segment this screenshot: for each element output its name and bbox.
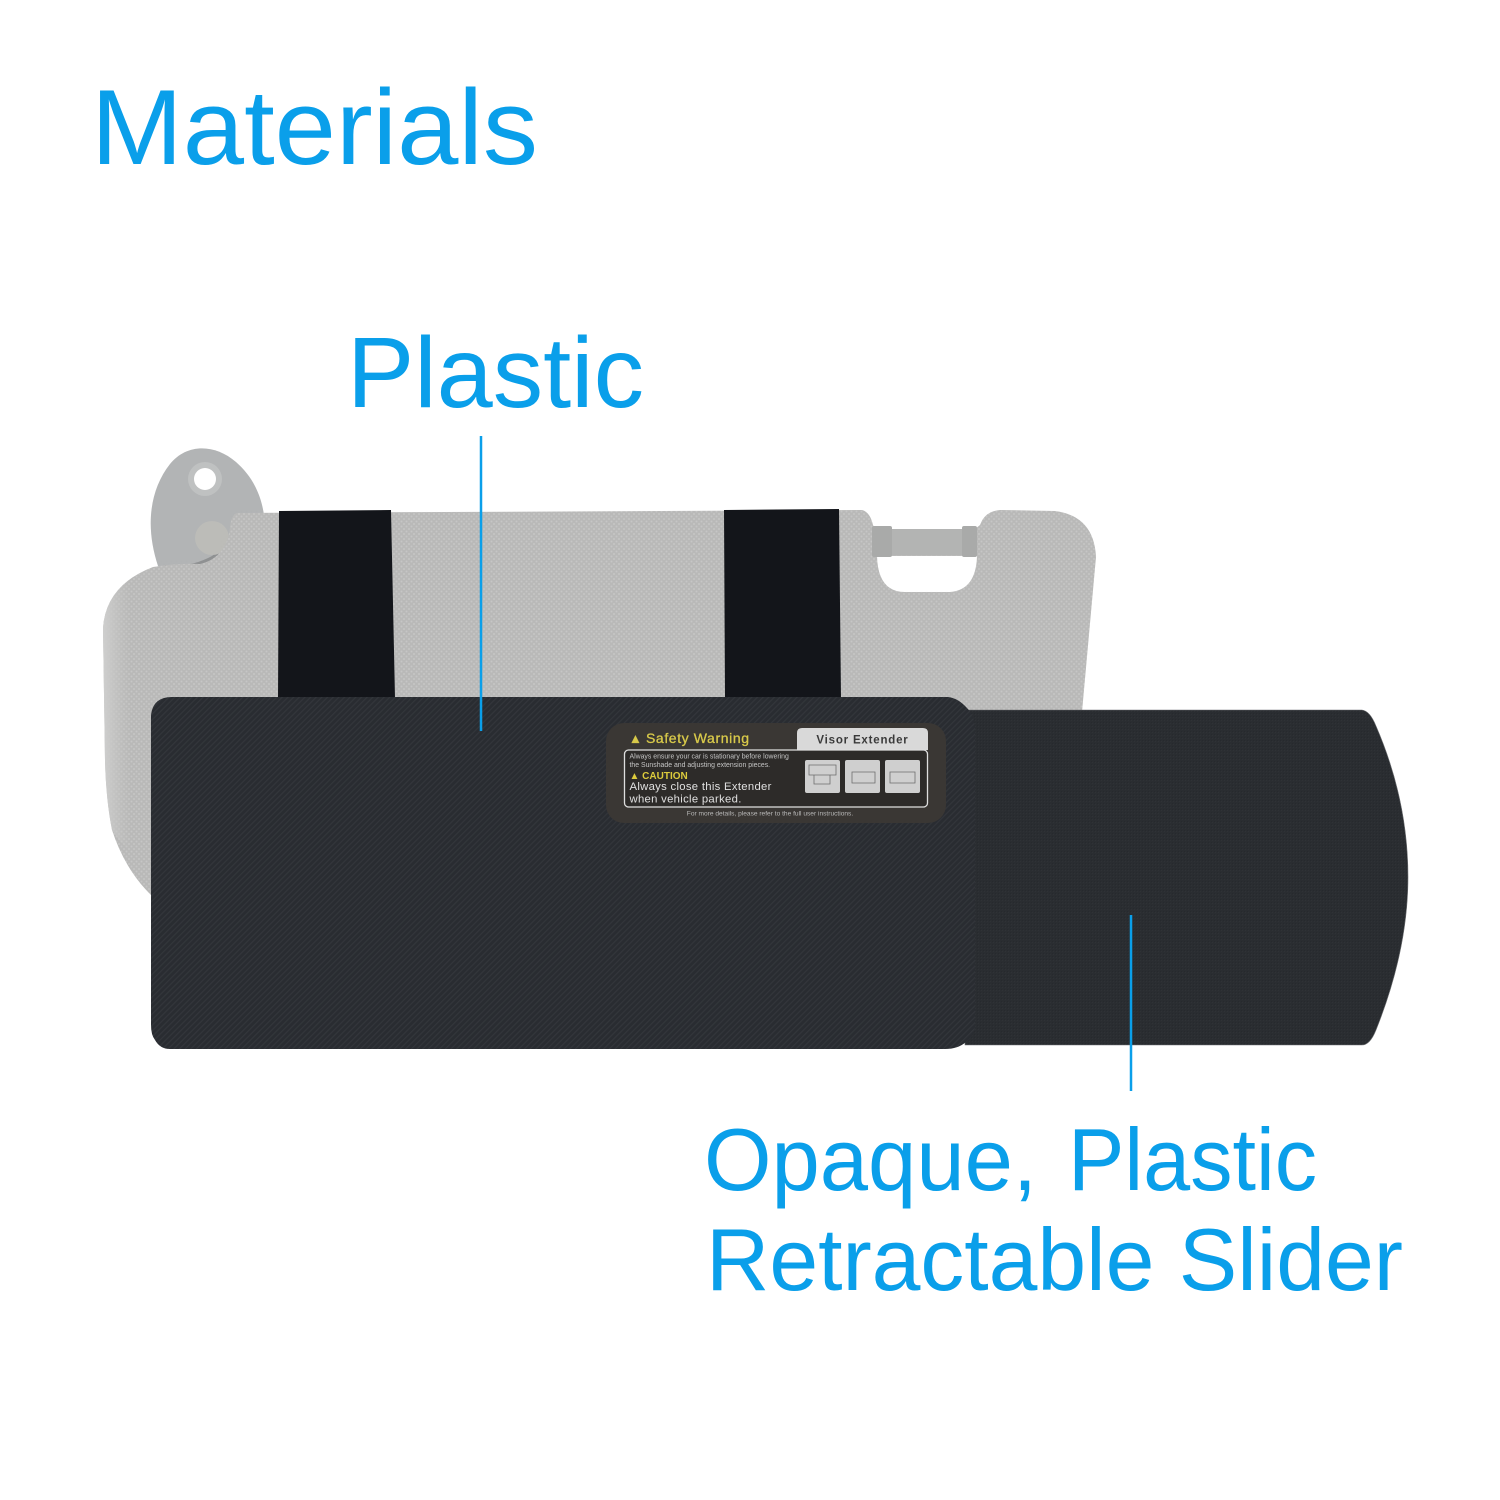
sticker warning heading: Safety Warning	[646, 730, 749, 746]
sticker footer: For more details, please refer to the full user instructions.	[687, 810, 853, 818]
label: plastic: Plastic	[347, 317, 644, 429]
visor hinge rod	[872, 526, 977, 557]
label: slider: Opaque,	[704, 1110, 1037, 1209]
sticker caution text: Always close this Extender	[630, 781, 772, 793]
black strap left	[278, 510, 395, 698]
sticker tab text: Visor Extender	[816, 734, 909, 746]
label: slider: Retractable Slider	[706, 1210, 1403, 1309]
label: slider: Plastic	[1068, 1110, 1317, 1209]
visor product illustration	[103, 448, 1408, 1049]
title: Materials	[91, 67, 538, 187]
sticker tab	[797, 728, 928, 750]
safety warning sticker	[606, 723, 946, 823]
sticker small text: the Sunshade and adjusting extension pieces.	[630, 762, 770, 769]
leader line: plastic	[480, 436, 482, 731]
sticker caution text: when vehicle parked.	[628, 794, 742, 806]
visor mounting bracket	[151, 448, 264, 572]
label: slider	[704, 1110, 1403, 1309]
grey visor body	[103, 510, 1096, 896]
retractable slider	[965, 710, 1408, 1045]
leader line: slider	[1130, 915, 1132, 1091]
sticker inner frame	[624, 750, 928, 807]
main extender panel	[151, 697, 975, 1049]
sticker step diagrams	[805, 760, 920, 793]
visor left edge highlight	[103, 567, 153, 850]
sticker small text: Always ensure your car is stationary before lowering	[630, 754, 789, 760]
sticker warning heading: ▲	[629, 731, 642, 746]
black strap right	[724, 509, 841, 698]
sticker caution: ▲ CAUTION	[630, 771, 688, 782]
